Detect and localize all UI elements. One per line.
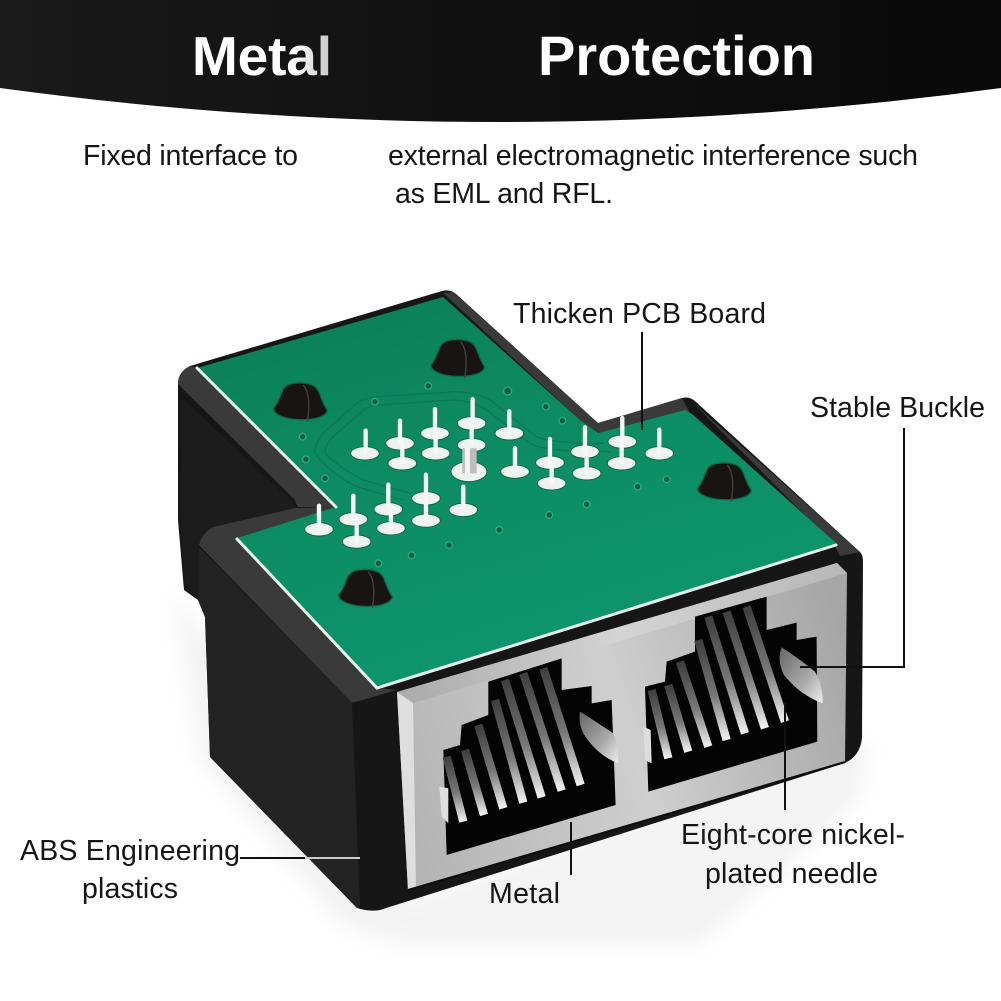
top lip highlight [397, 563, 847, 703]
PCB white edges [197, 368, 836, 688]
label: Eight-core nickel-plated needle: Eight-core nickel- [681, 819, 905, 851]
spring clip [580, 712, 618, 763]
port: right jack [643, 597, 823, 792]
intro text: external electromagnetic interference such [388, 140, 918, 172]
title [192, 24, 815, 87]
label: Stable Buckle: Stable Buckle [810, 392, 985, 424]
PCB traces [315, 392, 610, 500]
panel: metal shield [397, 563, 847, 890]
mounting posts [273, 339, 751, 608]
top banner [0, 0, 1001, 122]
label: ABS Engineering plastics [20, 835, 360, 905]
label: Stable Buckle [800, 392, 985, 667]
title: Metal [192, 25, 332, 87]
label: Eight-core nickel-plated needle: plated needle [705, 858, 878, 890]
bottom black edge [408, 762, 845, 890]
plastic rim [178, 292, 860, 703]
label: ABS Engineering plastics: ABS Engineering [20, 835, 240, 867]
PCB vias [299, 383, 670, 567]
label: ABS Engineering plastics: plastics [82, 873, 178, 905]
connector illustration [178, 290, 863, 911]
label: Thicken PCB Board: Thicken PCB Board [513, 298, 766, 330]
contact needles [447, 668, 581, 822]
soft shadow under connector [172, 590, 870, 945]
solder pins [305, 399, 674, 548]
intro text: as EML and RFL. [395, 178, 613, 210]
connector body [178, 290, 863, 911]
spring clip [780, 647, 823, 703]
title: Protection [538, 24, 815, 87]
intro text [83, 140, 918, 210]
port: left jack [439, 658, 618, 855]
label: Metal [489, 822, 571, 910]
rear inner face [180, 398, 297, 598]
contact needles [652, 607, 785, 758]
panel: PCB board [197, 297, 837, 688]
front left face [198, 547, 360, 908]
label: Metal: Metal [489, 878, 560, 910]
label: Eight-core nickel-plated needle [681, 703, 905, 890]
intro text: Fixed interface to [83, 140, 298, 172]
